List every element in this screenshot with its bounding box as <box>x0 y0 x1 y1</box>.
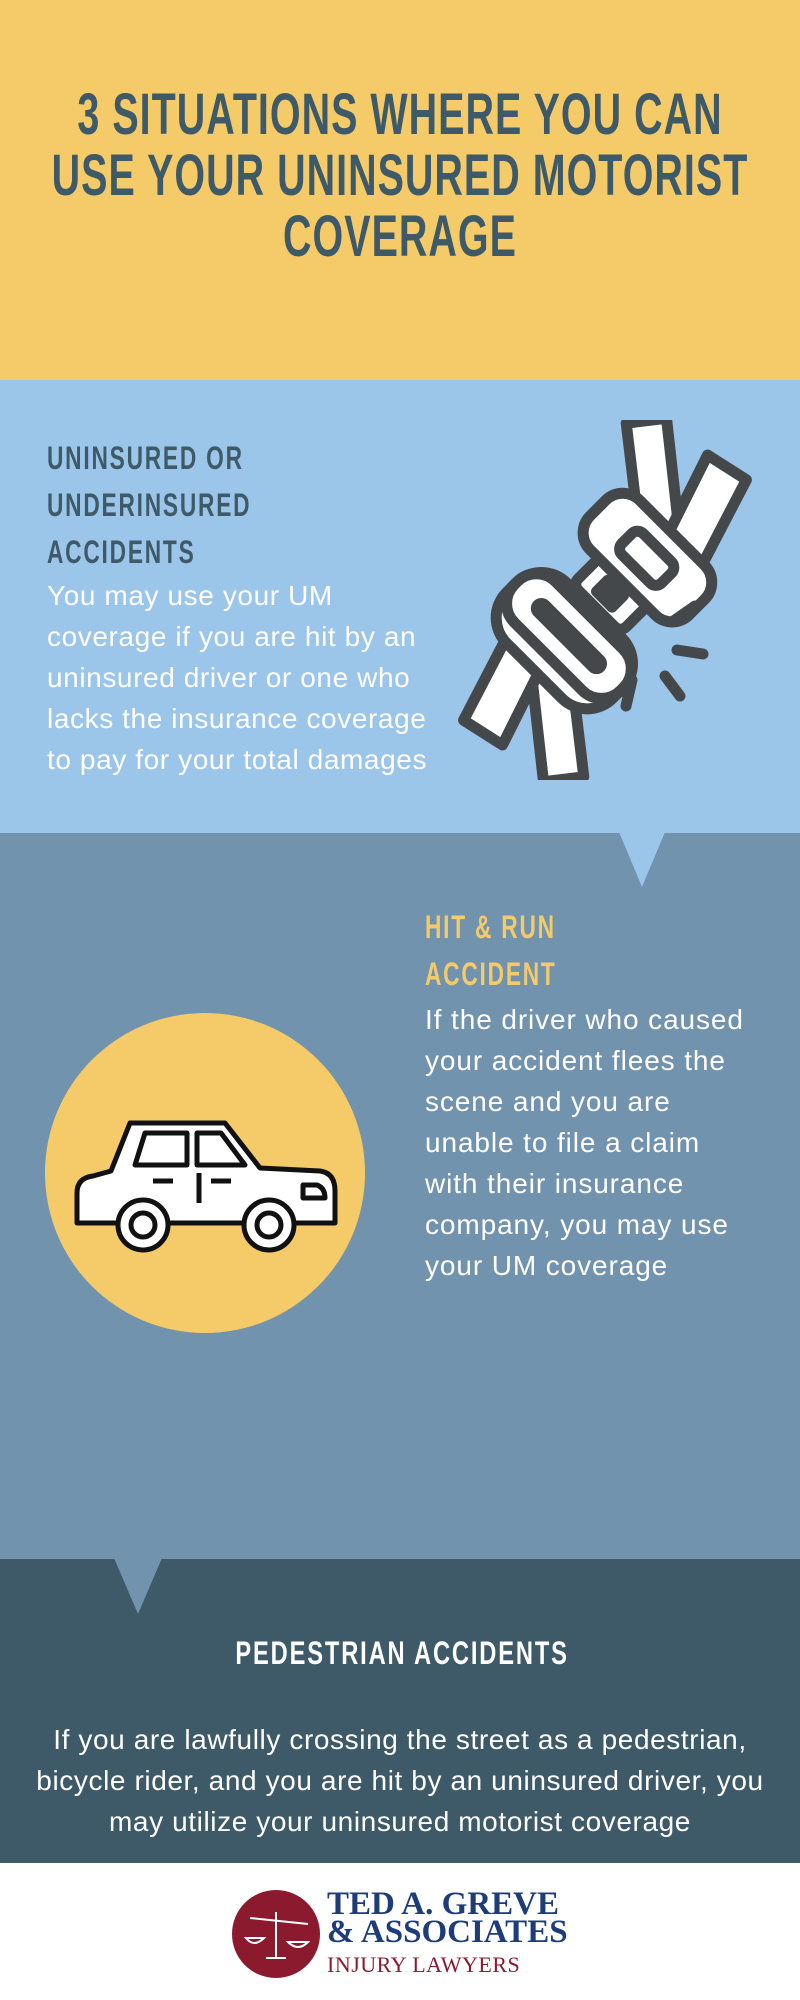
text block: uninsured: lacks the insurance coverage <box>47 703 426 734</box>
text block: pedestrian: If you are lawfully crossing the street as a pedestrian, <box>53 1724 747 1755</box>
icon: scales circle <box>232 1890 320 1978</box>
title <box>52 82 748 269</box>
logo text: & ASSOCIATES <box>327 1914 568 1950</box>
heading: uninsured or underinsured accidents <box>47 440 251 570</box>
logo: INJURY LAWYERS <box>327 1952 520 1977</box>
heading: uninsured or underinsured accidents: UNINSURED OR <box>47 440 244 476</box>
pointer arrow <box>620 833 664 887</box>
heading: uninsured or underinsured accidents: UNDERINSURED <box>47 487 251 523</box>
panel: uninsured accidents <box>0 380 800 833</box>
title: 3 SITUATIONS WHERE YOU CAN <box>77 82 723 147</box>
heading: pedestrian accidents: PEDESTRIAN ACCIDENTS <box>235 1635 569 1671</box>
pointer arrow <box>114 1559 162 1614</box>
heading: hit & run: ACCIDENT <box>425 956 557 992</box>
text block: uninsured: to pay for your total damages <box>47 744 427 775</box>
icon: seatbelt <box>458 420 752 780</box>
text block: pedestrian: may utilize your uninsured motorist coverage <box>109 1806 691 1837</box>
heading: hit & run: HIT & RUN <box>425 909 556 945</box>
heading: uninsured or underinsured accidents: ACCIDENTS <box>47 534 196 570</box>
text block: hit & run: your UM coverage <box>425 1250 668 1281</box>
text block: uninsured <box>47 580 427 775</box>
text block: uninsured: You may use your UM <box>47 580 333 611</box>
title: USE YOUR UNINSURED MOTORIST <box>52 143 748 208</box>
panel: pedestrian <box>0 1559 800 1863</box>
title: COVERAGE <box>283 204 517 269</box>
header panel <box>0 0 800 380</box>
text block: uninsured: coverage if you are hit by an <box>47 621 416 652</box>
logo text <box>327 1886 568 1950</box>
logo text: TED A. GREVE <box>327 1886 559 1922</box>
text block: hit & run: with their insurance <box>425 1168 684 1199</box>
text block: hit & run: unable to file a claim <box>425 1127 700 1158</box>
text block: hit & run: company, you may use <box>425 1209 729 1240</box>
text block: pedestrian: bicycle rider, and you are hit by an uninsured driver, you <box>36 1765 764 1796</box>
text block: pedestrian <box>36 1724 764 1837</box>
text block: hit & run: scene and you are <box>425 1086 671 1117</box>
heading: hit & run <box>425 909 557 992</box>
text block: hit & run <box>425 1004 744 1281</box>
logo <box>232 1886 568 1978</box>
panel: hit and run <box>0 833 800 1559</box>
text block: hit & run: your accident flees the <box>425 1045 726 1076</box>
text block: uninsured: uninsured driver or one who <box>47 662 410 693</box>
text block: hit & run: If the driver who caused <box>425 1004 744 1035</box>
icon: car in yellow circle <box>45 1013 365 1333</box>
